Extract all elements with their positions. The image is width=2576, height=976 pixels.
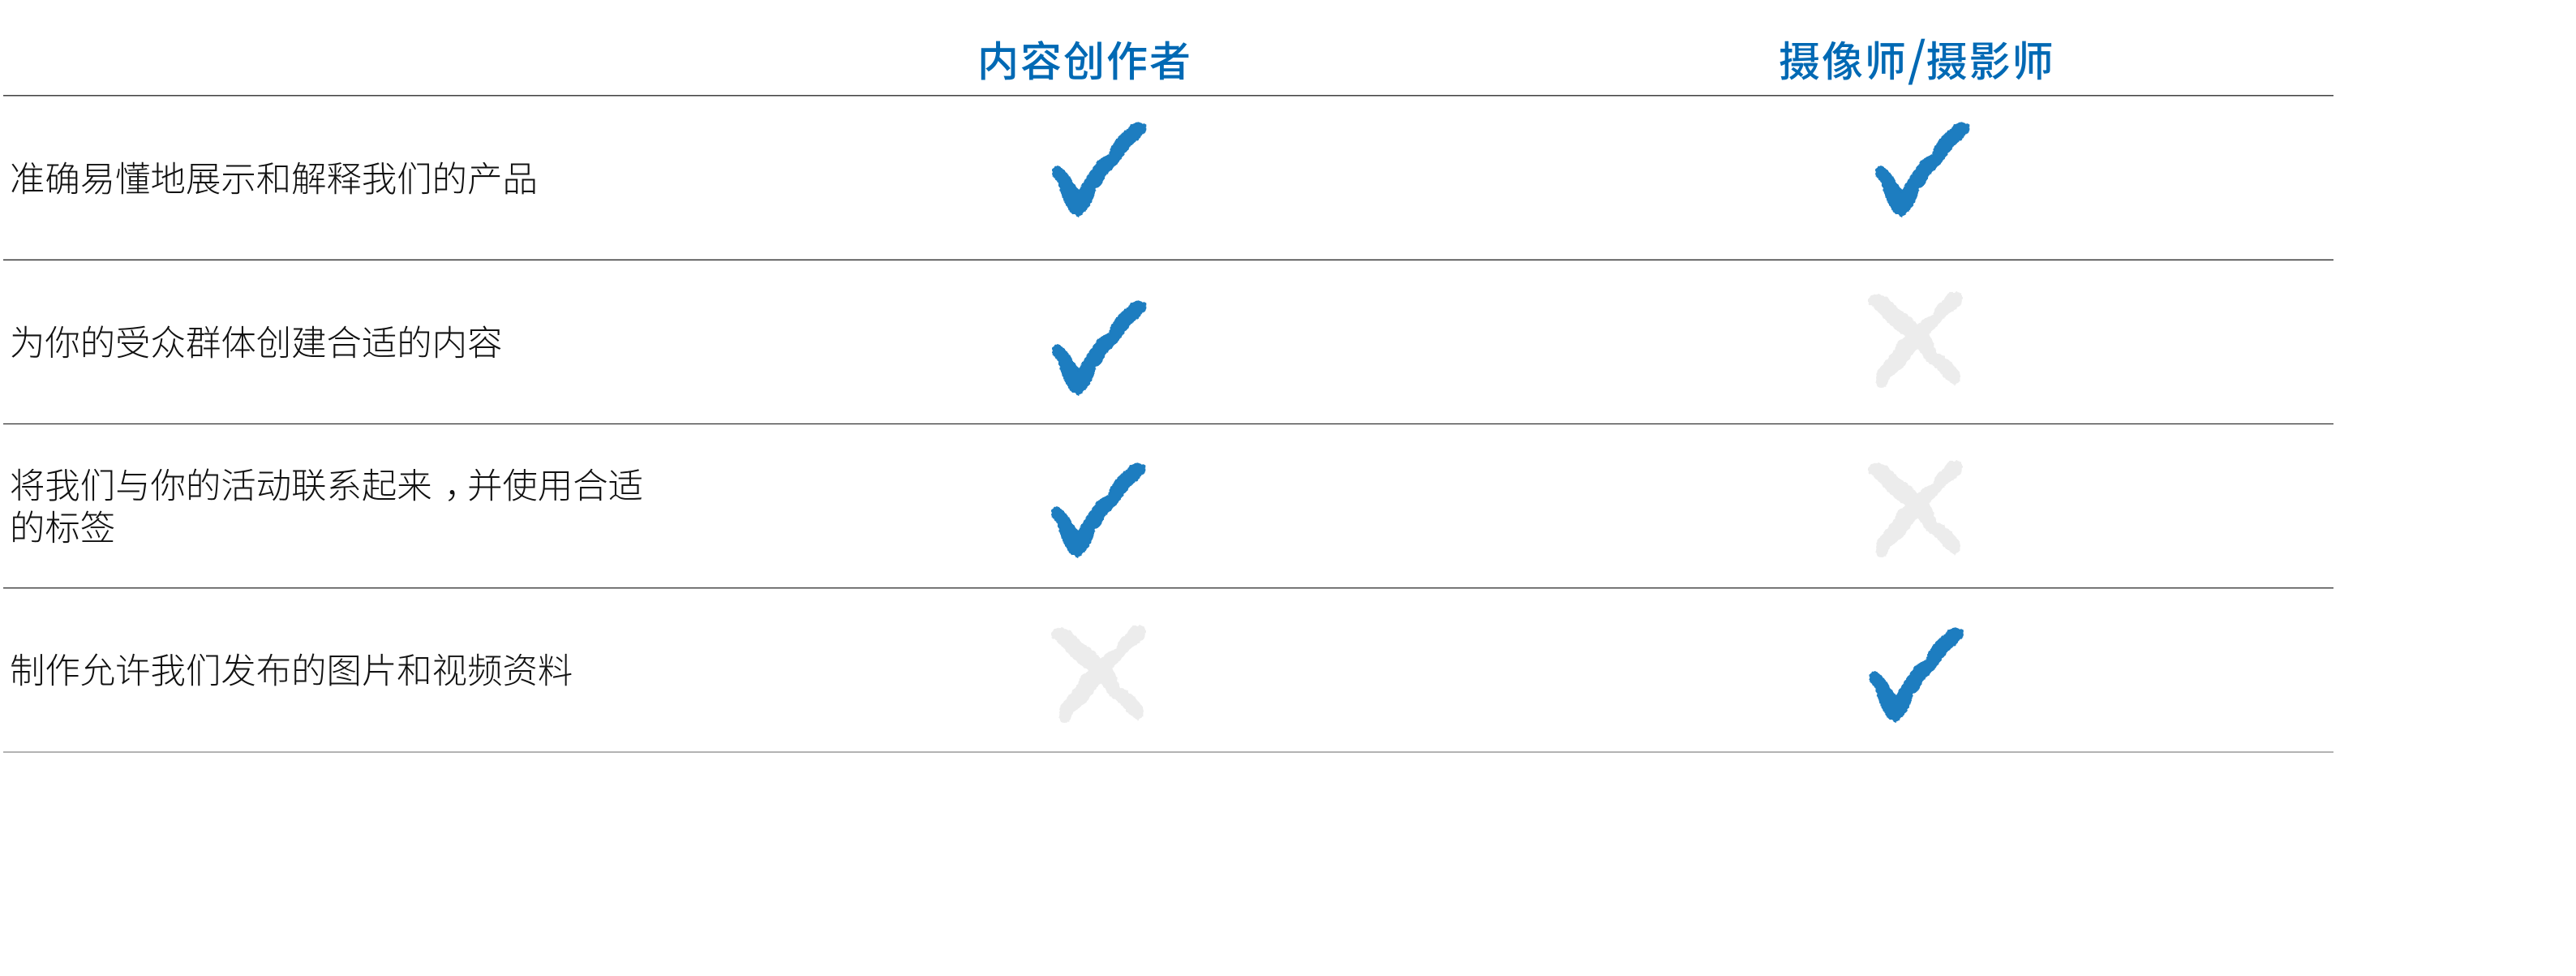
row 3 text: 将我们与你的活动联系起来 ，并使用合适 xyxy=(10,467,643,506)
row 4 text: 制作允许我们发布的图片和视频资料 xyxy=(10,652,573,691)
row 3 content creator icon: check xyxy=(1051,462,1145,558)
row 2 photographer icon: cross xyxy=(1868,291,1963,388)
row 3 photographer icon: cross xyxy=(1868,460,1963,557)
row 1 photographer icon: check xyxy=(1875,122,1969,217)
row 3 text: 的标签 xyxy=(10,509,115,548)
row 3 text xyxy=(10,467,643,548)
row 2 content creator icon: check xyxy=(1052,300,1147,396)
heading: videographers and photographers: 摄像师/摄影师 xyxy=(1779,22,2055,90)
row 4 content creator icon: cross xyxy=(1051,625,1146,723)
row 2 text: 为你的受众群体创建合适的内容 xyxy=(10,325,502,363)
row 4 photographer icon: check xyxy=(1869,627,1964,723)
row 1 content creator icon: check xyxy=(1052,122,1147,217)
row 1 text: 准确易懂地展示和解释我们的产品 xyxy=(10,161,538,200)
heading: content creators: 内容创作者 xyxy=(977,28,1192,88)
